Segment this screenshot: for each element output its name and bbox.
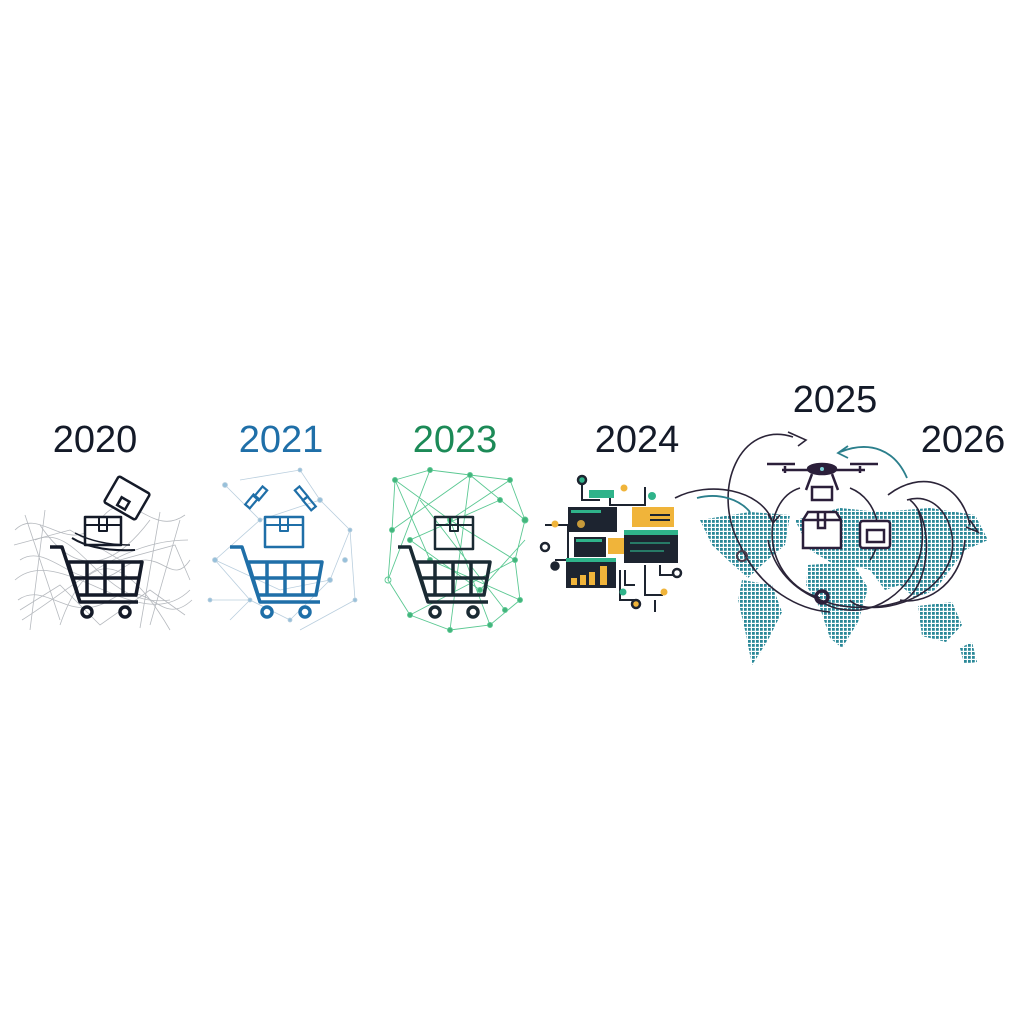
nodes: [541, 476, 681, 608]
dotted world map: [700, 508, 988, 665]
icon: parcel card: [860, 521, 890, 548]
icon: shopping cart: [398, 517, 490, 617]
icon: location pin: [816, 591, 828, 603]
arcs: [675, 434, 970, 612]
icon: package: [803, 512, 841, 548]
icon: motion dashes: [245, 486, 316, 510]
icon: shopping cart: [50, 517, 142, 617]
heading: 2023: 2023: [413, 419, 497, 461]
heading: 2025: 2025: [793, 379, 877, 421]
heading: 2021: 2021: [239, 419, 323, 461]
icon: shopping cart: [230, 517, 322, 617]
icon: tilted box: [104, 476, 150, 520]
panel: 2021 network cart: [208, 468, 357, 630]
green network mesh: [385, 468, 528, 632]
tangled scribble background: [14, 506, 192, 630]
panel: 2020 tangled cart: [14, 476, 192, 630]
arrowheads: [768, 432, 978, 532]
heading: 2024: 2024: [595, 419, 679, 461]
panel: 2023 dense green network cart: [385, 468, 528, 632]
circuit traces: [545, 480, 680, 612]
panel: 2024 data dashboard circuit: [541, 476, 681, 612]
heading: 2020: 2020: [53, 419, 137, 461]
icon: small pin: [737, 551, 747, 561]
panel: 2025-2026 global delivery map: [675, 432, 988, 665]
heading: 2026: 2026: [921, 419, 1005, 461]
dashboard panels: [566, 490, 678, 588]
network mesh: [208, 468, 357, 630]
icon: drone: [767, 464, 878, 500]
